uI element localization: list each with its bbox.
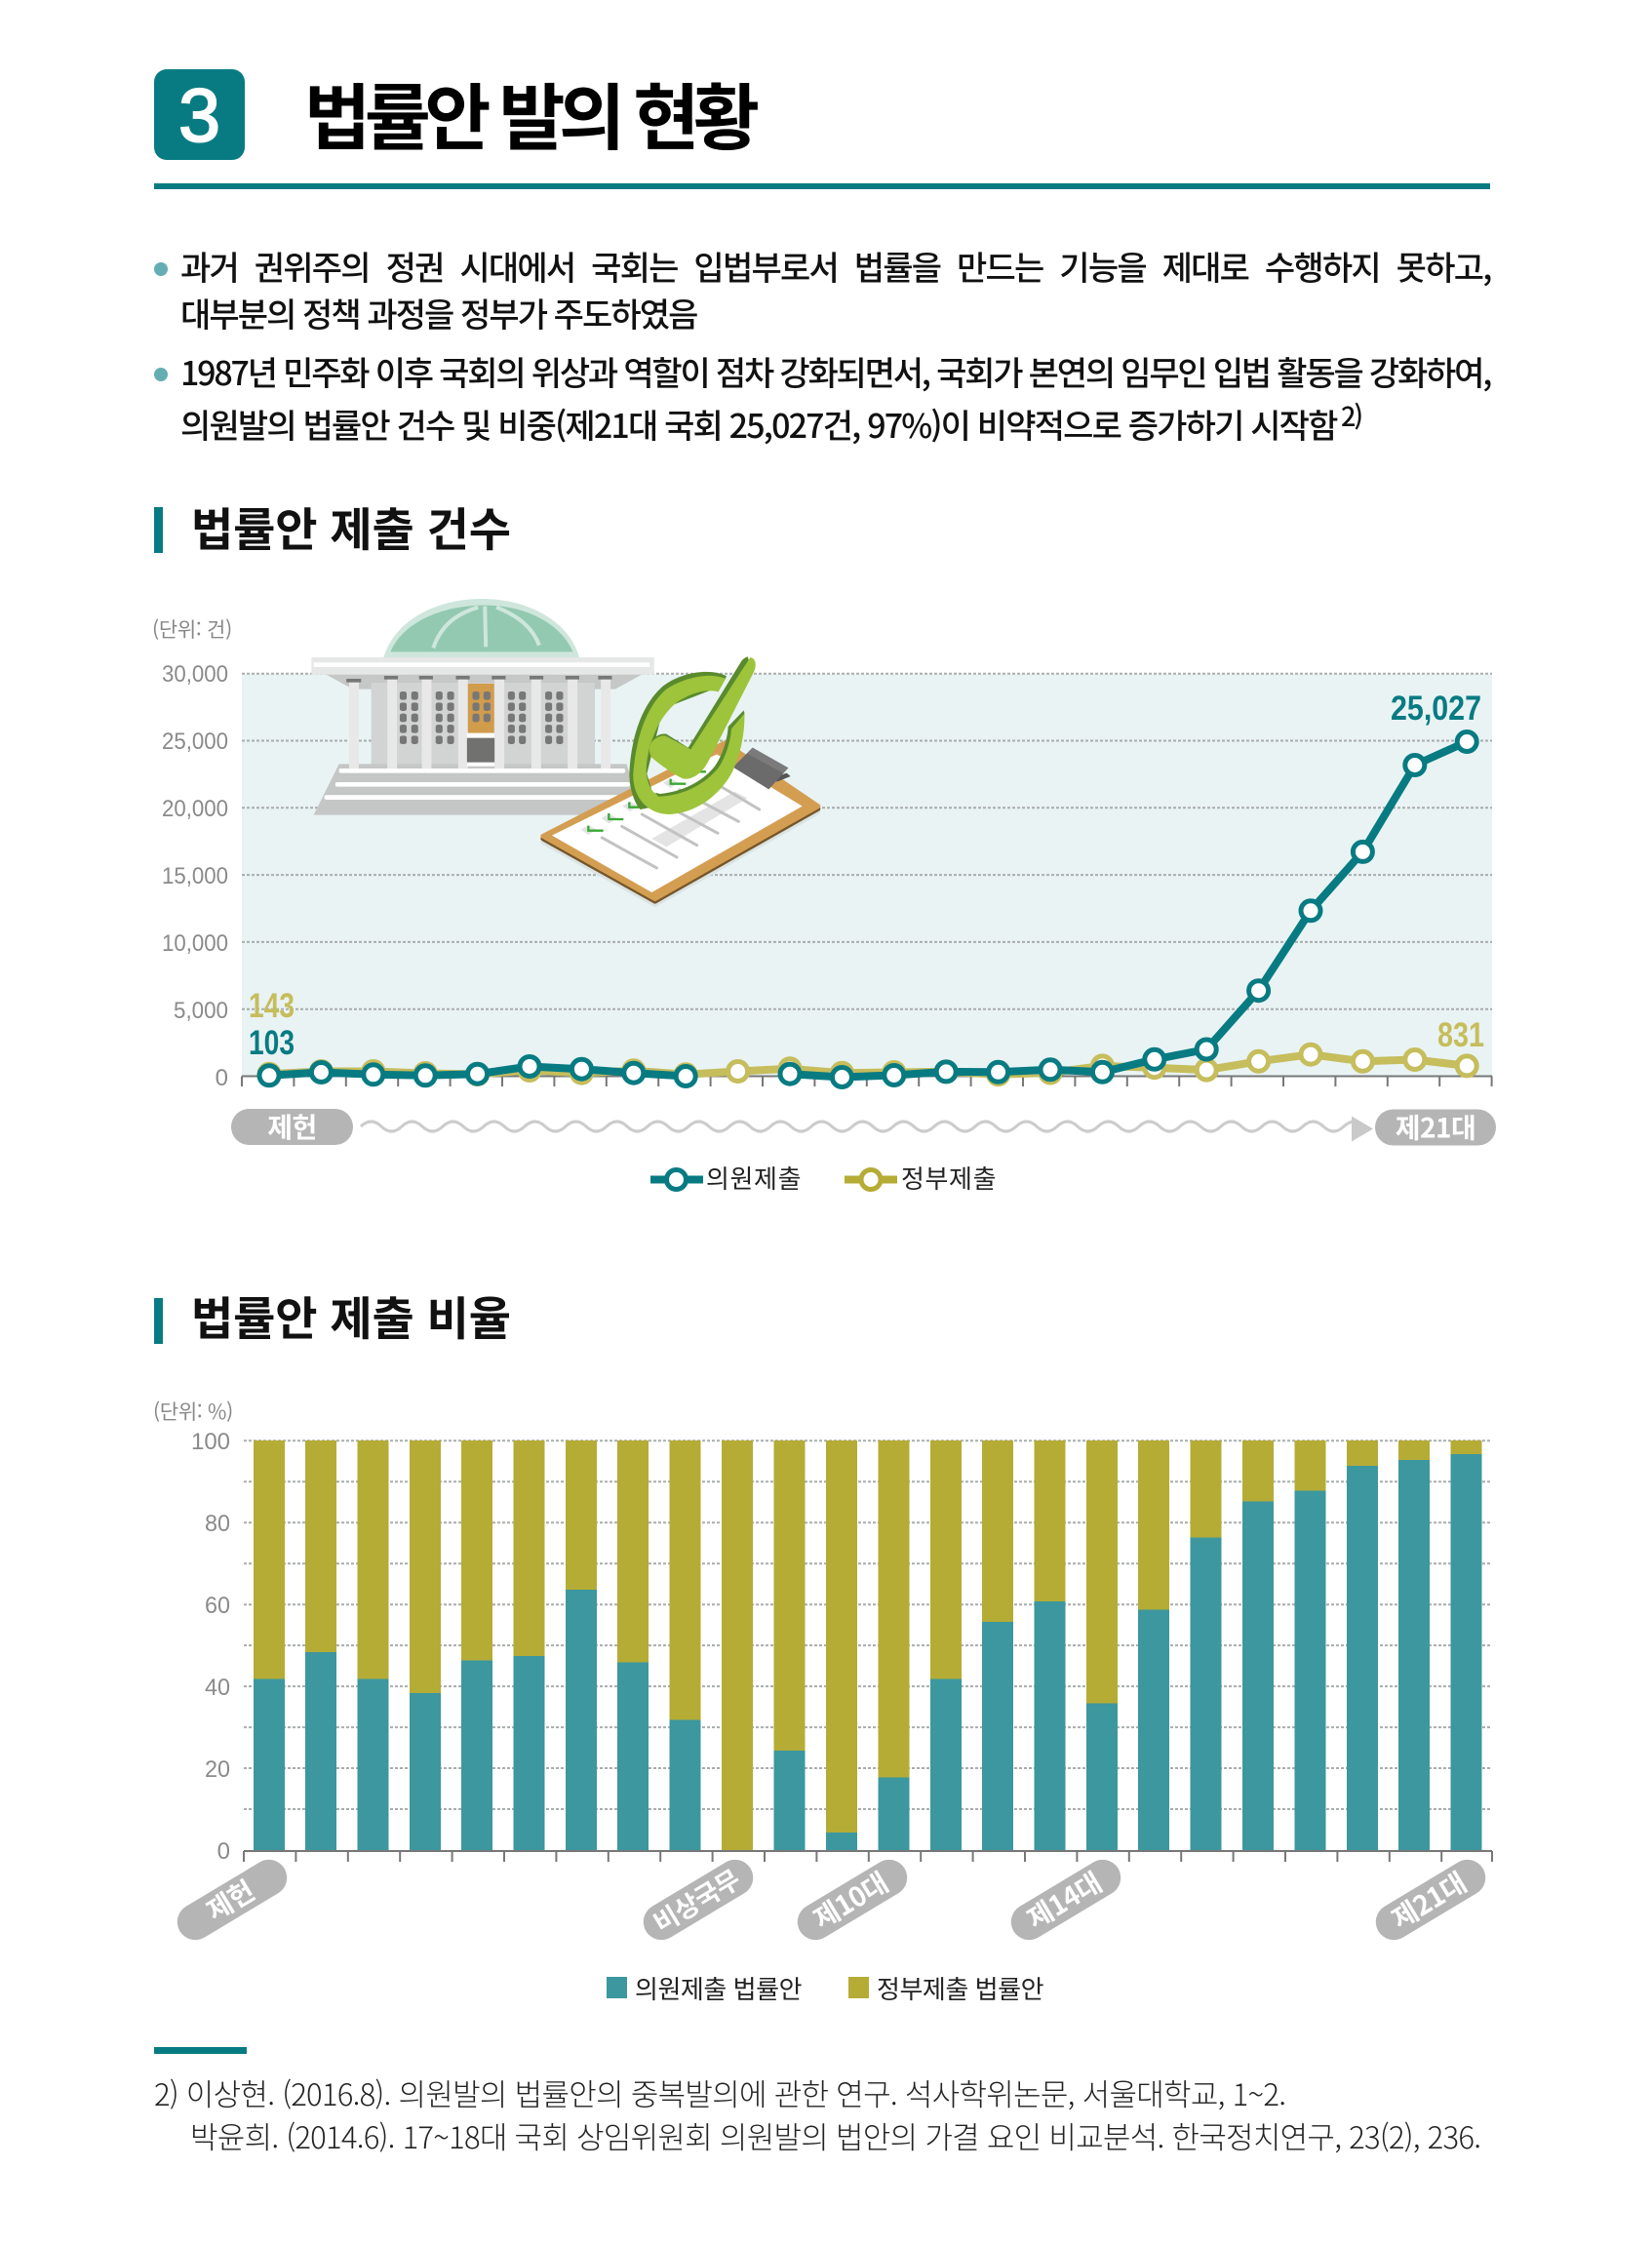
y axis labels: 0 (216, 1065, 228, 1091)
section heading: bill submission ratio: 법률안 제출 비율 (191, 1281, 510, 1349)
value label 831: 831 (1437, 1016, 1484, 1054)
x axis with ticks (244, 1851, 1492, 1862)
y axis labels (162, 661, 228, 1091)
rotated label: 제21대 (1368, 1851, 1492, 1947)
value label 103: 103 (249, 1024, 295, 1062)
y axis labels: 60 (205, 1593, 230, 1619)
plot background (242, 674, 1492, 1077)
y axis labels: 25,000 (162, 729, 228, 755)
rotated label: 제헌 (170, 1851, 294, 1947)
checklist ticks (581, 771, 706, 835)
value label 25,027: 25,027 (1391, 690, 1481, 728)
bullet 1: 과거 권위주의 정권 시대에서 국회는 입법부로서 법률을 만드는 기능을 제대로 수행하지 못하고, (180, 242, 1491, 290)
green check ring (629, 672, 744, 814)
timeline wavy arrow (361, 1116, 1373, 1141)
rotated label: 제14대 (1003, 1851, 1127, 1947)
bullet 2 (154, 347, 1491, 448)
bullet 1: 대부분의 정책 과정을 정부가 주도하였음 (180, 289, 697, 336)
legend: bar series (607, 1970, 1043, 2006)
section heading: bill submission counts: 법률안 제출 건수 (191, 493, 510, 560)
bullet 2: 1987년 민주화 이후 국회의 위상과 역할이 점차 강화되면서, 국회가 본연의 임무인 입법 활동을 강화하여, (180, 347, 1491, 395)
rotated label: 제21대: 제21대 (1384, 1863, 1473, 1938)
rotated label: 비상국무: 비상국무 (646, 1859, 746, 1941)
y axis labels: 20 (205, 1756, 230, 1783)
timeline start pill (231, 1107, 353, 1146)
footnote text: 박윤희. (2014.6). 17~18대 국회 상임위원회 의원발의 법안의 가결 요인 비교분석. 한국정치연구, 23(2), 236. (190, 2113, 1479, 2157)
footnote text: 2) 이상현. (2016.8). 의원발의 법률안의 중복발의에 관한 연구. 석사학위논문, 서울대학교, 1~2. (154, 2070, 1284, 2114)
footnote text (154, 2070, 1479, 2157)
stacked bar chart: submission ratio (153, 1397, 1492, 2006)
illustration: clipboard with green check (543, 656, 818, 905)
clipboard shadow and frame (543, 743, 818, 905)
legend: member and government lines: 의원제출 (706, 1160, 801, 1196)
illustration: national assembly building (311, 599, 654, 815)
y axis labels: 100 (191, 1429, 230, 1455)
y axis labels (191, 1429, 230, 1865)
legend: bar series: 의원제출 법률안 (635, 1970, 802, 2006)
government share bars (254, 1440, 1482, 1851)
green check mark (649, 656, 756, 779)
legend: member and government lines (650, 1160, 996, 1196)
unit label: (단위: 건) (152, 614, 231, 644)
y axis labels: 30,000 (162, 661, 228, 688)
y axis labels: 40 (205, 1675, 230, 1701)
legend: bar series: 정부제출 법률안 (877, 1970, 1043, 2006)
timeline end pill: 제21대 (1396, 1108, 1475, 1147)
member share bars (254, 1454, 1482, 1851)
footnote rule (154, 2047, 247, 2054)
timeline start pill: 제헌 (267, 1107, 317, 1146)
bullet 2: 의원발의 법률안 건수 및 비중(제21대 국회 25,027건, 97%)이 비약적으로 증가하기 시작함 (180, 400, 1338, 448)
value label 143: 143 (249, 987, 295, 1025)
rotated label: 비상국무 (636, 1851, 760, 1947)
x axis with ticks (242, 1077, 1492, 1086)
section number badge: 3 (178, 74, 220, 158)
legend: member and government lines: 정부제출 (901, 1160, 996, 1196)
rotated label: 제헌: 제헌 (199, 1871, 261, 1929)
y axis labels: 15,000 (162, 863, 228, 889)
member bills line (259, 731, 1476, 1086)
rotated label: 제10대 (790, 1851, 914, 1947)
bullet 1 (154, 242, 1491, 336)
unit label: (단위: %) (153, 1397, 232, 1426)
timeline end pill (1375, 1108, 1496, 1147)
y axis labels: 10,000 (162, 930, 228, 957)
rotated label: 제14대: 제14대 (1019, 1863, 1108, 1938)
y axis labels: 0 (217, 1838, 230, 1865)
title underline (154, 183, 1490, 189)
section number badge (154, 69, 245, 160)
y axis labels: 20,000 (162, 796, 228, 822)
rotated label: 제10대: 제10대 (806, 1863, 894, 1938)
line chart: bills submitted (152, 599, 1496, 1196)
government bills line (259, 1045, 1476, 1084)
bullet 2: 2) (1341, 396, 1363, 434)
title heading: 법률안 발의 현황 (304, 60, 760, 165)
paper sheet (552, 754, 803, 892)
intro bullet text (154, 242, 1491, 448)
title block (154, 60, 1490, 189)
y axis labels: 80 (205, 1511, 230, 1537)
metal clip (733, 748, 791, 789)
y axis labels: 5,000 (174, 998, 228, 1024)
